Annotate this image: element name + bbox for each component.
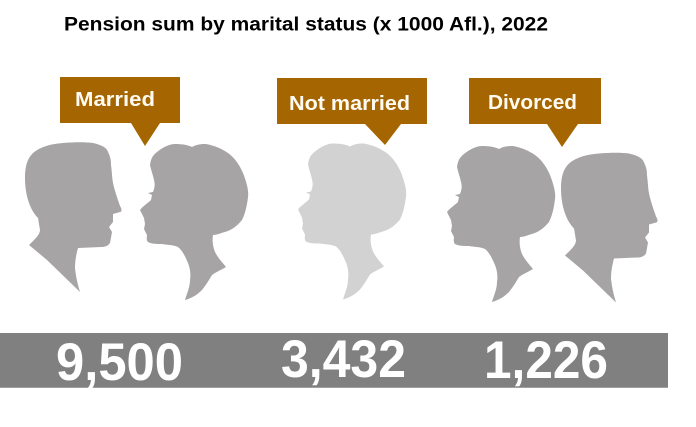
callout: not married xyxy=(277,78,427,145)
callout: divorced: Divorced xyxy=(488,92,577,114)
callout: not married: Not married xyxy=(289,93,410,115)
title: Pension sum by marital status (x 1000 Afl.), 2022 xyxy=(64,14,548,36)
value: divorced: 1,226 xyxy=(484,331,608,390)
icon: woman silhouette facing left xyxy=(140,144,248,300)
panel: divorced xyxy=(447,78,658,302)
icon: woman silhouette, light grey xyxy=(298,144,406,300)
icon: man silhouette facing right xyxy=(25,142,122,292)
value: not married: 3,432 xyxy=(281,330,406,389)
callout: divorced xyxy=(469,78,601,147)
icon: man silhouette facing right xyxy=(561,153,658,302)
panel: married xyxy=(25,77,248,300)
callout: married xyxy=(60,77,180,146)
icon: woman silhouette facing left xyxy=(447,146,555,302)
value: married: 9,500 xyxy=(56,333,183,392)
callout: married: Married xyxy=(75,89,155,111)
value bar xyxy=(0,330,668,392)
panel: not married xyxy=(277,78,427,300)
